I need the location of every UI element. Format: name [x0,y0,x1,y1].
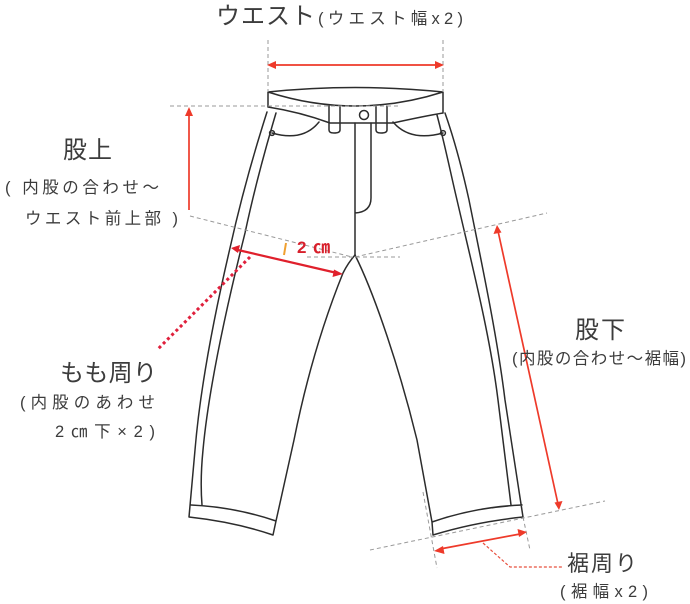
waistband [268,88,443,123]
rise label: 股上 [63,137,112,164]
hem label [560,551,648,601]
button [360,110,368,120]
thigh label: もも周り [60,360,157,387]
thigh dotted leader [157,257,250,350]
pants illustration [189,88,523,535]
rise arrow [185,107,193,210]
thigh label: 2㎝下×2) [55,423,155,441]
left pocket [272,122,319,136]
waist label [216,3,463,30]
thigh label: (内股のあわせ [20,393,155,412]
inseam label: 股下 [575,317,625,344]
fly [355,123,371,255]
hem leader [483,543,562,567]
waist label: ウエスト [216,3,315,30]
guide lines [170,40,605,568]
hem label: (裾幅x2) [560,582,648,601]
thigh label [20,360,157,441]
rise label: ウエスト前上部 ) [25,209,178,228]
hem label: 裾周り [567,551,637,576]
right pocket [393,122,443,136]
rise label [5,137,178,228]
inseam arrow [494,225,562,510]
waist arrow [267,61,444,69]
belt loops [329,106,387,133]
rivets [270,131,445,135]
left leg [189,112,355,535]
right leg [355,113,523,535]
thigh arrow [231,245,343,277]
hem arrow [434,529,527,554]
2cm label: 2 ㎝ [297,238,330,257]
waist label: (ウエスト幅x2) [318,9,463,28]
inseam label: (内股の合わせ～裾幅) [512,349,686,368]
inseam label [512,317,686,368]
rise label: ( 内股の合わせ～ [5,178,159,197]
orange 2cm marker [284,243,286,255]
